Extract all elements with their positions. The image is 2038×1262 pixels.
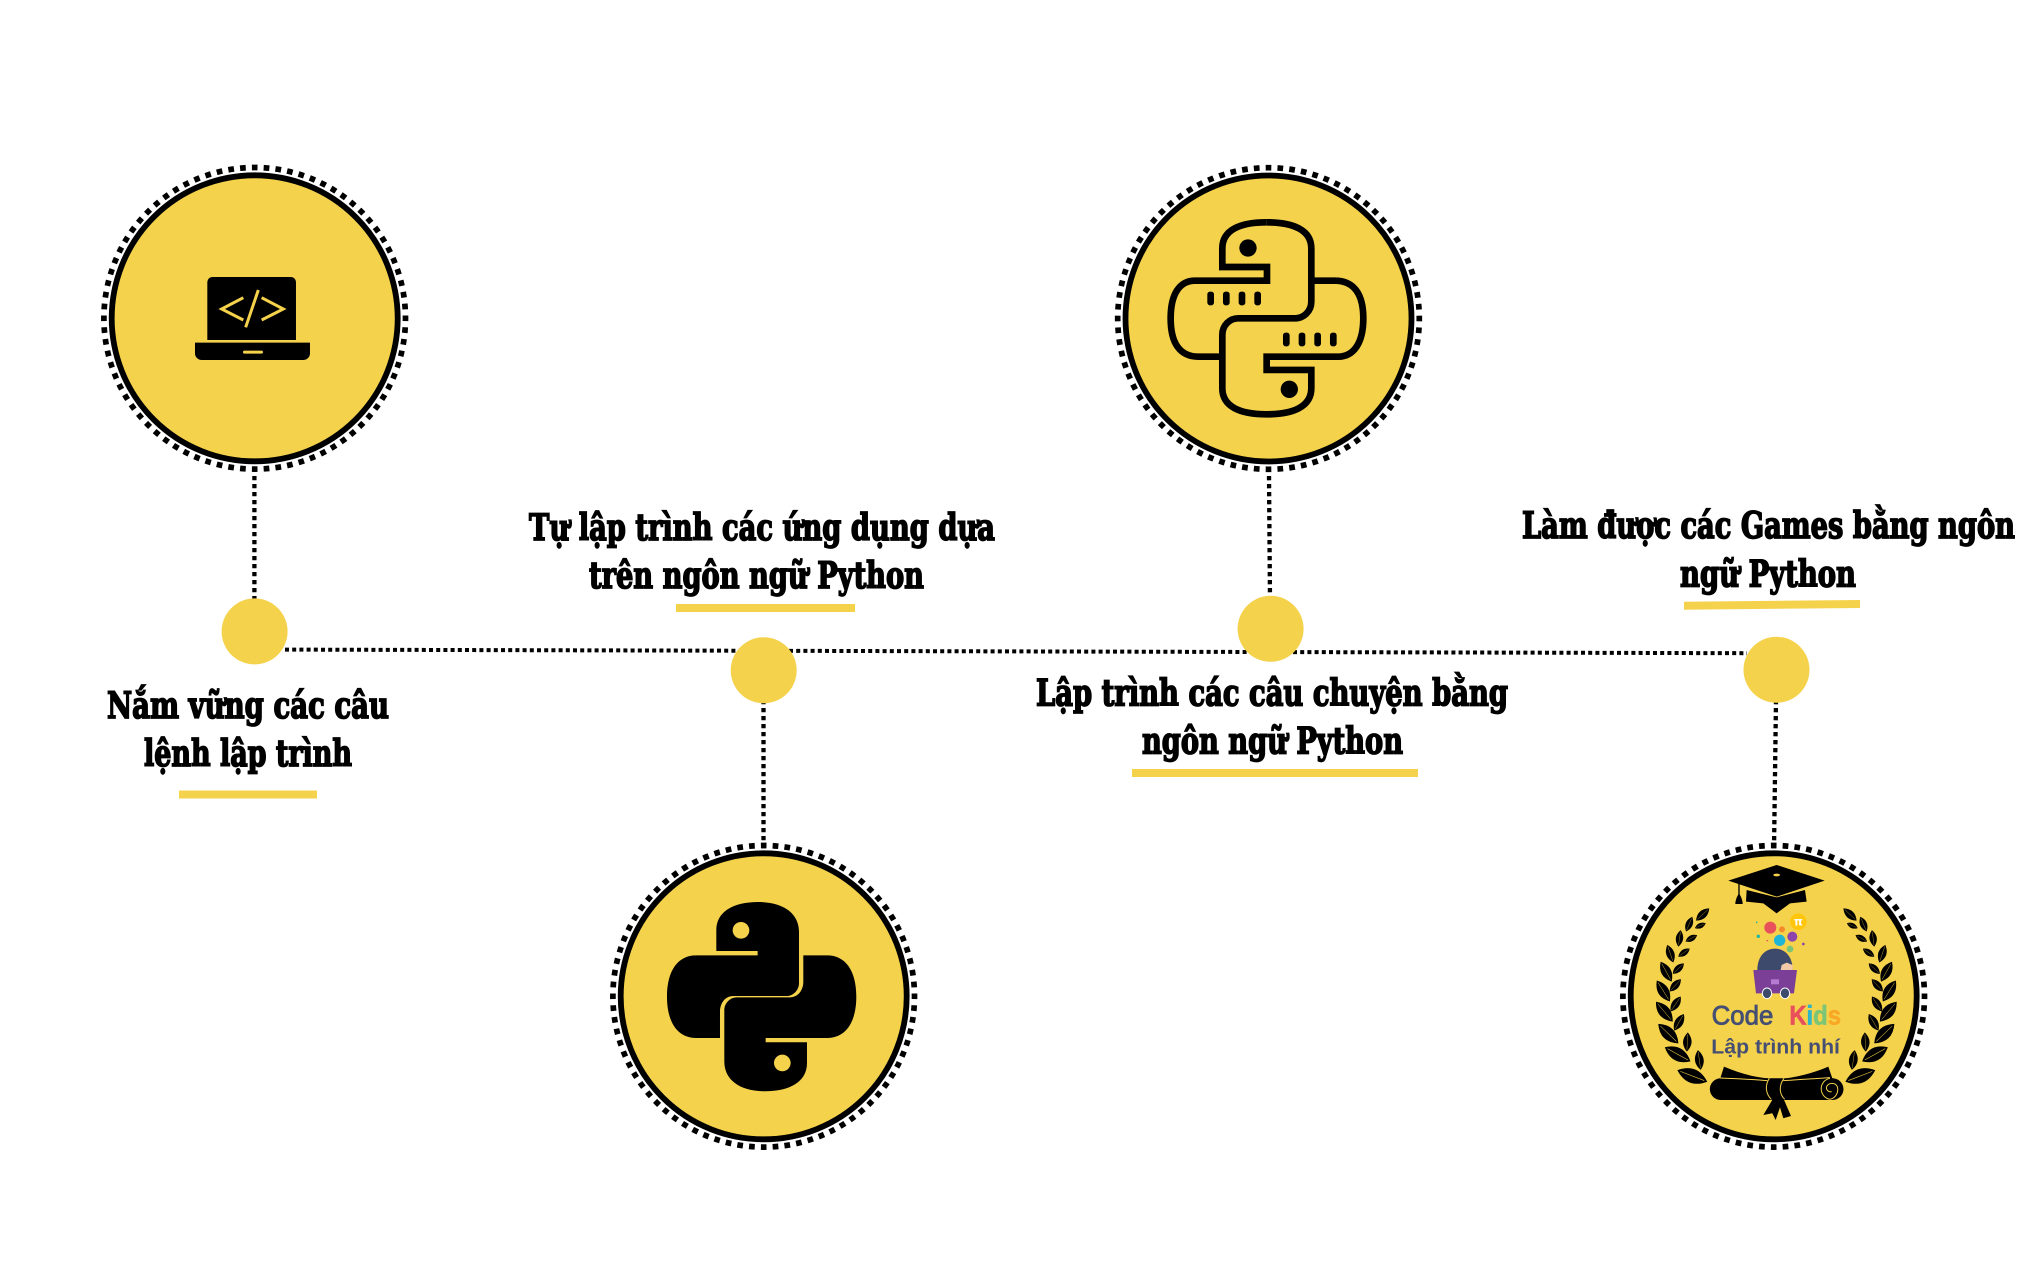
text block: step 1 label bbox=[107, 685, 389, 775]
node: step 2 marker bbox=[731, 637, 797, 703]
panel: step 1 laptop badge bbox=[104, 167, 406, 469]
icon: laurel wreath bbox=[1652, 905, 1901, 1088]
icon: outline python logo bbox=[1171, 222, 1363, 414]
connector: step 2 vertical bbox=[761, 700, 766, 850]
node: step 3 marker bbox=[1238, 596, 1304, 662]
underline: step 3 bbox=[1132, 769, 1418, 777]
underline: step 1 bbox=[179, 790, 317, 798]
text block: step 1 label: lệnh lập trình bbox=[144, 733, 352, 775]
text block: step 1 label: Nắm vững các câu bbox=[107, 685, 389, 727]
text block: step 3 label: ngôn ngữ Python bbox=[1142, 720, 1403, 762]
node: step 1 marker bbox=[222, 598, 288, 664]
logo tagline: Lập trình nhí bbox=[1711, 1036, 1842, 1058]
logo wordmark: Code Kids bbox=[1712, 1000, 1841, 1030]
icon: Code Kids child with laptop: π bbox=[1794, 915, 1803, 929]
icon: solid python logo bbox=[667, 902, 856, 1091]
text block: step 2 label bbox=[529, 507, 995, 597]
logo wordmark: Code Kids: Kids bbox=[1789, 1000, 1841, 1030]
text block: step 4 label bbox=[1522, 505, 2015, 596]
icon: laptop with code bbox=[195, 277, 310, 360]
underline: step 4 bbox=[1684, 600, 1860, 610]
text block: step 2 label: Tự lập trình các ứng dụng dựa bbox=[529, 507, 995, 549]
text block: step 2 label: trên ngôn ngữ Python bbox=[589, 555, 924, 597]
icon: Code Kids child with laptop bbox=[1753, 913, 1807, 999]
text block: step 3 label: Lập trình các câu chuyện bằng bbox=[1036, 672, 1508, 714]
horizontal dotted timeline bbox=[285, 650, 1747, 653]
icon: graduation cap bbox=[1728, 865, 1825, 913]
text block: step 4 label: ngữ Python bbox=[1680, 554, 1856, 596]
icon: diploma scroll bbox=[1710, 1067, 1843, 1120]
panel: step 4 Code Kids graduation badge bbox=[1623, 846, 1924, 1147]
logo wordmark: Code Kids: Code bbox=[1712, 1000, 1773, 1030]
underline: step 2 bbox=[676, 604, 855, 612]
connector: step 1 vertical bbox=[252, 476, 257, 600]
connector: step 4 vertical bbox=[1774, 700, 1776, 850]
panel: step 2 solid python badge bbox=[613, 846, 914, 1147]
connector: step 3 vertical bbox=[1269, 476, 1270, 600]
node: step 4 marker bbox=[1744, 637, 1810, 703]
text block: step 3 label bbox=[1036, 672, 1508, 762]
panel: step 3 outline python badge bbox=[1118, 168, 1419, 469]
